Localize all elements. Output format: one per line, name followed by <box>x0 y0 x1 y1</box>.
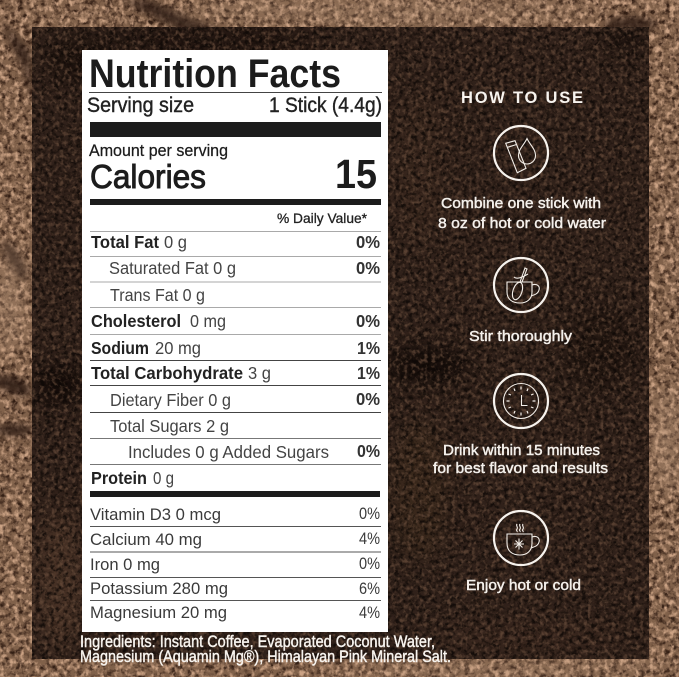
icon: stick and water drop <box>494 126 548 180</box>
row: total carbohydrate: Total Carbohydrate <box>91 363 243 383</box>
row: magnesium <box>90 603 380 622</box>
row: vitamin d3 <box>90 504 380 524</box>
ingredients text: Magnesium (Aquamin Mg®), Himalayan Pink Mineral Salt. <box>80 647 451 666</box>
panel title: Nutrition Facts <box>89 52 341 96</box>
row: cholesterol: 0% <box>356 311 380 331</box>
step 3 text <box>433 442 608 477</box>
row: calcium <box>90 529 380 549</box>
row: total fat: Total Fat <box>91 232 159 252</box>
row: sodium: 1% <box>357 338 380 358</box>
row: total carbohydrate: 3 g <box>248 363 271 383</box>
row: vitamin d3: Vitamin D3 0 mcg <box>90 505 221 524</box>
calories block: 15 <box>335 151 377 197</box>
ingredients text: Ingredients: Instant Coffee, Evaporated Coconut Water, <box>80 632 435 651</box>
calories block <box>89 142 377 197</box>
divider rules <box>89 92 382 601</box>
row: total carbohydrate <box>91 363 380 383</box>
row: vitamin d3: 0% <box>359 504 380 523</box>
calories block: Calories <box>90 158 206 195</box>
row: protein: Protein <box>91 468 147 488</box>
step 3 text: for best flavor and results <box>433 460 608 477</box>
row: dietary fiber: 0% <box>356 389 380 409</box>
row: total sugars: Total Sugars 2 g <box>110 416 229 436</box>
row: potassium: 6% <box>359 579 380 598</box>
serving size row <box>87 94 382 117</box>
row: magnesium: Magnesium 20 mg <box>90 603 227 622</box>
row: protein: 0 g <box>153 468 174 488</box>
icon: cup with spoon <box>494 258 548 312</box>
step 4 text: Enjoy hot or cold <box>466 577 581 594</box>
how to use heading: HOW TO USE <box>461 89 583 107</box>
row: calcium: 4% <box>359 529 380 548</box>
step 3 text: Drink within 15 minutes <box>443 442 600 459</box>
row: sodium: 20 mg <box>155 338 201 358</box>
row: calcium: Calcium 40 mg <box>90 530 202 549</box>
daily value header: % Daily Value* <box>277 210 368 226</box>
row: iron: 0% <box>359 554 380 573</box>
row: saturated fat: 0% <box>356 258 380 278</box>
serving size row: 1 Stick (4.4g) <box>269 94 382 117</box>
row: saturated fat: Saturated Fat 0 g <box>109 258 236 278</box>
step 2 text: Stir thoroughly <box>469 328 573 345</box>
row: potassium: Potassium 280 mg <box>90 579 228 598</box>
icon: clock <box>494 374 548 428</box>
row: sodium: Sodium <box>91 338 149 358</box>
row: cholesterol: Cholesterol <box>91 311 181 331</box>
calories block: Amount per serving <box>89 142 228 160</box>
step 1 text <box>438 195 606 232</box>
row: dietary fiber <box>110 389 380 410</box>
row: total fat: 0 g <box>164 232 187 252</box>
row: total fat: 0% <box>356 232 380 252</box>
row: magnesium: 4% <box>359 603 380 622</box>
ingredients text <box>80 632 451 666</box>
row: added sugars: Includes 0 g Added Sugars <box>128 442 329 462</box>
step 1 text: Combine one stick with <box>441 195 601 212</box>
row: potassium <box>90 579 380 598</box>
row: saturated fat <box>109 258 380 278</box>
row: dietary fiber: Dietary Fiber 0 g <box>110 390 231 410</box>
icon: hot or cold cup <box>494 511 548 565</box>
row: iron: Iron 0 mg <box>90 555 160 574</box>
serving size row: Serving size <box>87 94 194 117</box>
row: cholesterol: 0 mg <box>190 311 226 331</box>
row: sodium <box>91 338 380 358</box>
row: total fat <box>91 232 380 252</box>
nutrition facts panel <box>82 50 388 632</box>
row: added sugars: 0% <box>357 441 380 461</box>
step 1 text: 8 oz of hot or cold water <box>438 215 606 232</box>
row: cholesterol <box>91 311 380 331</box>
row: total carbohydrate: 1% <box>357 363 380 383</box>
row: iron <box>90 554 380 574</box>
row: trans fat: Trans Fat 0 g <box>110 285 205 305</box>
